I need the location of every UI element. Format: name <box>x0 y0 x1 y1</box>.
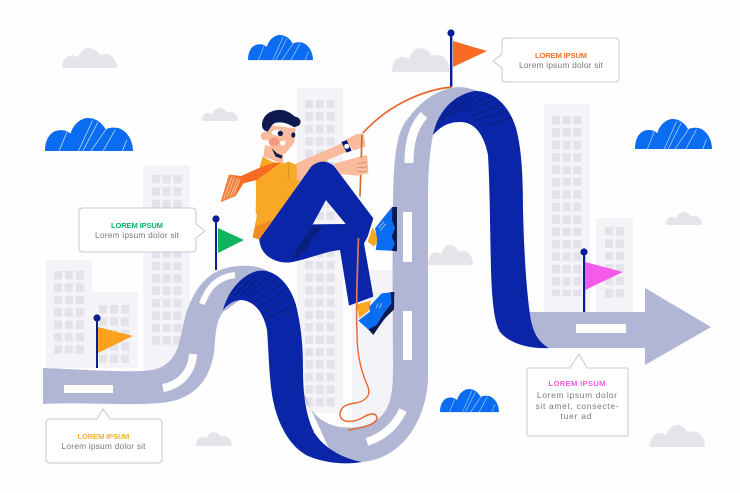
shirt <box>256 157 297 213</box>
hair <box>262 110 301 132</box>
callout: orange: Lorem ipsum dolor sit <box>519 60 604 70</box>
winding road <box>43 87 711 463</box>
callout: yellow: Lorem ipsum dolor sit <box>62 441 146 451</box>
watch <box>341 140 352 153</box>
rope through hands <box>360 135 362 197</box>
pants shade <box>292 227 323 262</box>
callout: green: Lorem ipsum dolor sit <box>95 230 180 240</box>
callout: pink: sit amet, consecte- <box>536 401 619 411</box>
flag: pink <box>580 248 623 312</box>
callout: orange <box>493 38 619 82</box>
road: gray left section <box>43 266 270 404</box>
rope <box>340 87 452 430</box>
arms <box>296 143 347 180</box>
callout: green: LOREM IPSUM <box>111 221 163 230</box>
man: hands and legs <box>253 133 397 335</box>
callout: yellow <box>46 409 162 463</box>
top shoe <box>368 227 379 247</box>
tie <box>221 163 281 202</box>
road: blue first bend <box>223 271 362 463</box>
callout: yellow: LOREM IPSUM <box>78 432 130 441</box>
road: gray arrow section <box>524 288 711 365</box>
flag: green <box>212 215 244 270</box>
neck <box>263 145 283 164</box>
gray clouds <box>62 48 705 447</box>
callout: green <box>79 208 205 252</box>
bottom shoe <box>357 301 371 318</box>
flag: orange <box>447 29 487 87</box>
shirt fold <box>258 163 289 189</box>
road: gray middle section <box>300 87 478 462</box>
callout: pink <box>527 354 628 436</box>
callout: pink: Lorem ipsum dolor <box>537 390 617 400</box>
callout: pink: tuer ad <box>560 411 592 421</box>
lane dashes <box>64 385 113 393</box>
road: blue second bend <box>433 91 549 348</box>
pants <box>259 162 373 306</box>
hatching on bends <box>228 272 296 320</box>
hand on rope <box>346 133 366 151</box>
lower shirt <box>253 180 300 240</box>
callout: pink: LOREM IPSUM <box>548 379 606 388</box>
ear <box>261 132 269 140</box>
callout: orange: LOREM IPSUM <box>535 51 587 60</box>
face <box>267 125 296 155</box>
arm <box>290 153 332 200</box>
blue clouds <box>45 35 712 412</box>
climbing man <box>221 110 397 335</box>
city buildings <box>46 88 633 430</box>
flag: yellow <box>93 314 133 368</box>
man: upper body and head <box>221 110 332 213</box>
